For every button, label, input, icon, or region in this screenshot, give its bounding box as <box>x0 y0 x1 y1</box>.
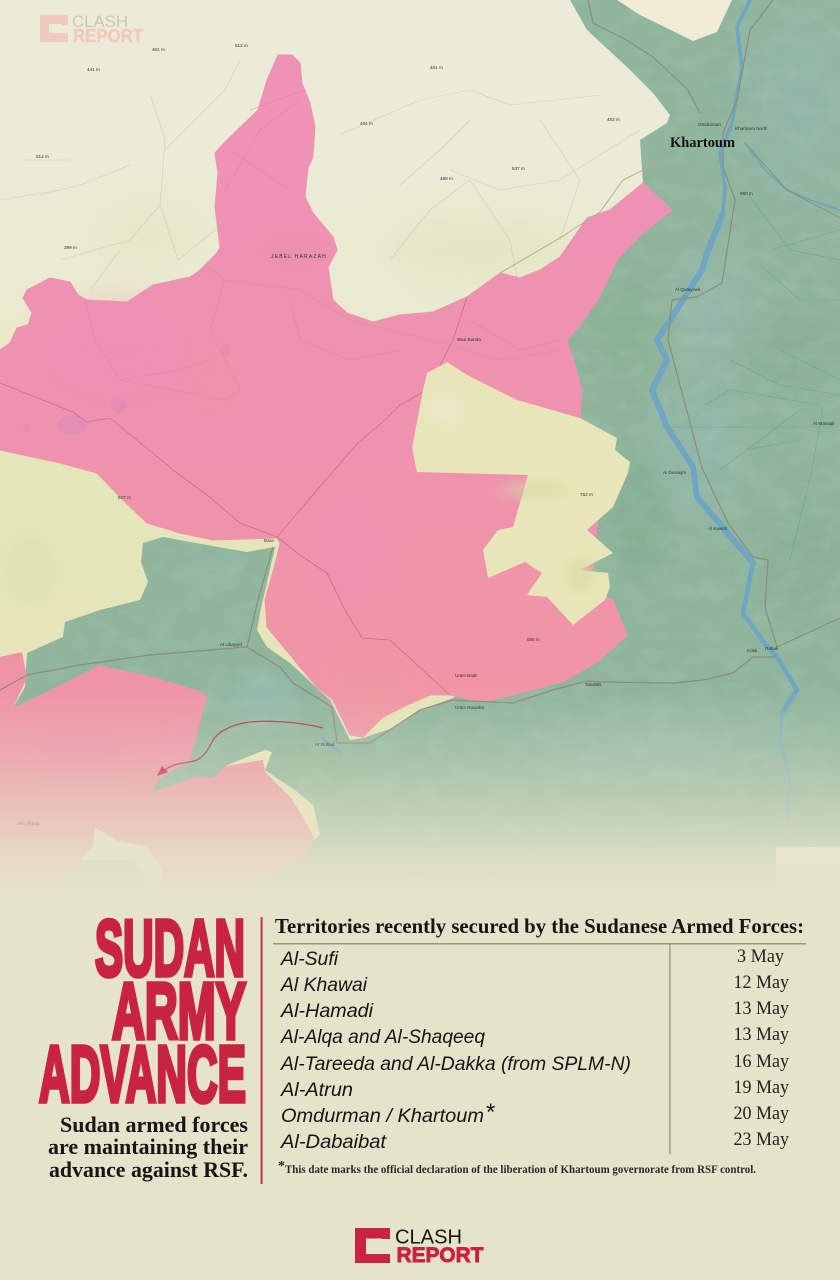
row names <box>280 948 631 1153</box>
map background: neutral terrain: 481 m <box>430 65 443 70</box>
map background: neutral terrain: 537 m <box>512 166 525 171</box>
title: ADVANCE <box>39 1030 246 1118</box>
row names: Al-Sufi <box>280 948 339 970</box>
row dates <box>734 947 790 1150</box>
row names: Al-Hamadi <box>280 1000 374 1022</box>
city labels: Al Duwaym <box>663 470 686 475</box>
table: territories and dates <box>273 943 806 1154</box>
row names: Al-Dabaibat <box>280 1131 388 1153</box>
row names: Omdurman / Khartoum <box>281 1105 484 1127</box>
city labels: 680 m <box>740 191 753 196</box>
road network in pink zone <box>0 297 467 695</box>
map background: neutral terrain: 489 m <box>440 176 453 181</box>
rivers <box>322 0 840 823</box>
subtitle: Sudan armed forces <box>60 1112 248 1137</box>
territory: central neutral enclave <box>412 362 630 625</box>
row dates: 13 May <box>734 999 790 1019</box>
map background: neutral terrain: 483 m <box>607 117 620 122</box>
territory: central neutral enclave: 762 m <box>580 492 593 497</box>
row names: Al-Alqa and Al-Shaqeeq <box>280 1026 485 1048</box>
territory: pink (RSF held, south-west) <box>0 652 320 895</box>
title <box>39 904 246 1118</box>
city labels: Al Manaqil <box>813 421 834 426</box>
territory: green (Sudanese Armed Forces held) <box>0 0 840 900</box>
row dates: 16 May <box>734 1052 790 1072</box>
map background: neutral terrain: 441 m <box>87 67 100 72</box>
logo: Clash Report: REPORT <box>396 1244 484 1267</box>
city labels <box>220 122 834 747</box>
territory: pink (RSF held, central): Bara <box>264 538 274 543</box>
logo: watermark top-left: CLASH <box>72 12 128 31</box>
title: SUDAN <box>95 904 245 992</box>
map background: neutral terrain: 491 m <box>360 121 373 126</box>
city labels: Omdurman <box>698 122 721 127</box>
map background: neutral terrain: 512 m <box>36 154 49 159</box>
roads <box>0 0 840 743</box>
row names: Al-Tareeda and Al-Dakka (from SPLM-N) <box>280 1053 631 1075</box>
divider: red vertical rule <box>261 917 263 1184</box>
row names: Al Khawai <box>280 974 368 996</box>
city labels: Rabak <box>765 646 779 651</box>
fade to panel <box>0 690 840 900</box>
map background: neutral terrain: 512 m <box>235 43 248 48</box>
subtitle: are maintaining their <box>48 1134 248 1159</box>
city labels: Al Qutaynah <box>675 287 701 292</box>
city labels: Kosti <box>747 648 757 653</box>
title: ARMY <box>112 966 246 1056</box>
territory: pink (RSF held, central): Umm Badr <box>455 673 477 678</box>
map <box>0 0 840 900</box>
row dates: 23 May <box>734 1130 790 1150</box>
territory: pink (RSF held, central): 586 m <box>527 637 540 642</box>
territory: pink (RSF held, central): Wad Banda <box>457 337 481 342</box>
subtitle <box>48 1112 248 1182</box>
territory: pink (RSF held, central): 527 m <box>118 495 131 500</box>
row names: * <box>486 1099 495 1126</box>
row names: Al-Atrun <box>280 1079 353 1101</box>
logo: Clash Report <box>355 1226 484 1267</box>
logo: watermark top-left: REPORT <box>73 26 143 46</box>
table heading: Territories recently secured by the Sudanese Armed Forces: <box>275 914 804 938</box>
map background: neutral terrain: 399 m <box>64 245 77 250</box>
row dates: 3 May <box>737 947 785 967</box>
footnote: This date marks the official declaration of the liberation of Khartoum governorate from RSF control. <box>285 1164 756 1176</box>
city labels: Umm Ruwaba <box>455 705 485 710</box>
territory: pink (RSF held, south-west): Ash Shaqq <box>17 821 40 826</box>
city labels: Tandalti <box>585 682 601 687</box>
logo: Clash Report: CLASH <box>395 1226 462 1248</box>
footnote: * <box>278 1159 285 1174</box>
row dates: 19 May <box>734 1078 790 1098</box>
subtitle: advance against RSF. <box>49 1157 248 1182</box>
footnote <box>278 1159 756 1176</box>
label: Khartoum: Khartoum <box>670 135 735 151</box>
row dates: 20 May <box>734 1104 790 1124</box>
city labels: Ar Rahad <box>315 742 335 747</box>
city labels: Khartoum North <box>735 126 768 131</box>
city labels: Al Ubayyid <box>220 642 242 647</box>
territory: pink (RSF held, central): JEBEL HARAZAH <box>271 254 327 260</box>
row dates: 12 May <box>734 973 790 993</box>
canals east of the Nile <box>670 190 840 560</box>
logo: watermark top-left <box>40 12 143 46</box>
territory: pink (RSF held, central) <box>0 55 672 737</box>
arrow: army advance <box>157 721 323 776</box>
row dates: 13 May <box>734 1025 790 1045</box>
map background: neutral terrain: 461 m <box>152 47 165 52</box>
city labels: Al Kawah <box>708 526 728 531</box>
map background: neutral terrain <box>0 0 670 740</box>
